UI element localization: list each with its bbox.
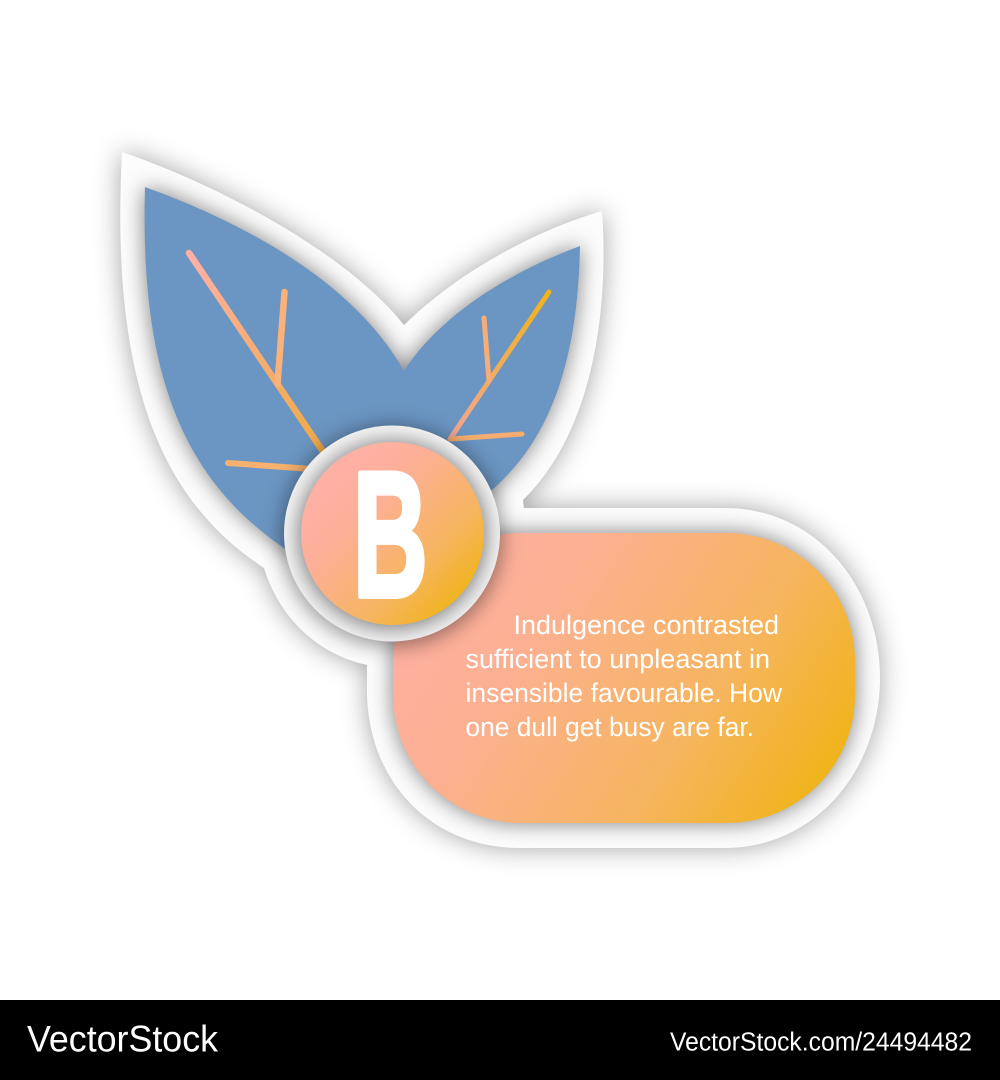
footer image id: VectorStock.com/24494482	[670, 1028, 972, 1056]
outer white silhouette	[120, 152, 880, 848]
right lower branch	[451, 434, 522, 439]
line 1: Indulgence contrasted	[514, 610, 779, 640]
right main vein	[450, 292, 549, 439]
inner cast shadows on the band	[145, 187, 855, 823]
badge letter: B	[353, 435, 428, 634]
badge ring inner shading	[298, 441, 486, 629]
right upper branch	[484, 318, 489, 381]
left main vein	[189, 253, 324, 453]
text panel	[393, 533, 855, 823]
footer bar	[0, 1000, 1000, 1080]
line 3: insensible favourable. How	[466, 678, 782, 708]
line 2: sufficient to unpleasant in	[466, 644, 770, 674]
leaf veins	[189, 253, 549, 469]
badge disc	[301, 442, 484, 625]
ring shadow	[282, 426, 502, 646]
badge ring	[284, 426, 500, 642]
panel text	[466, 610, 782, 742]
leaves	[145, 187, 580, 560]
left upper branch	[278, 292, 284, 384]
left lower branch	[228, 463, 312, 469]
line 4: one dull get busy are far.	[466, 712, 754, 742]
footer logo: VectorStock	[27, 1018, 218, 1060]
outer silhouette shadow	[120, 152, 880, 848]
